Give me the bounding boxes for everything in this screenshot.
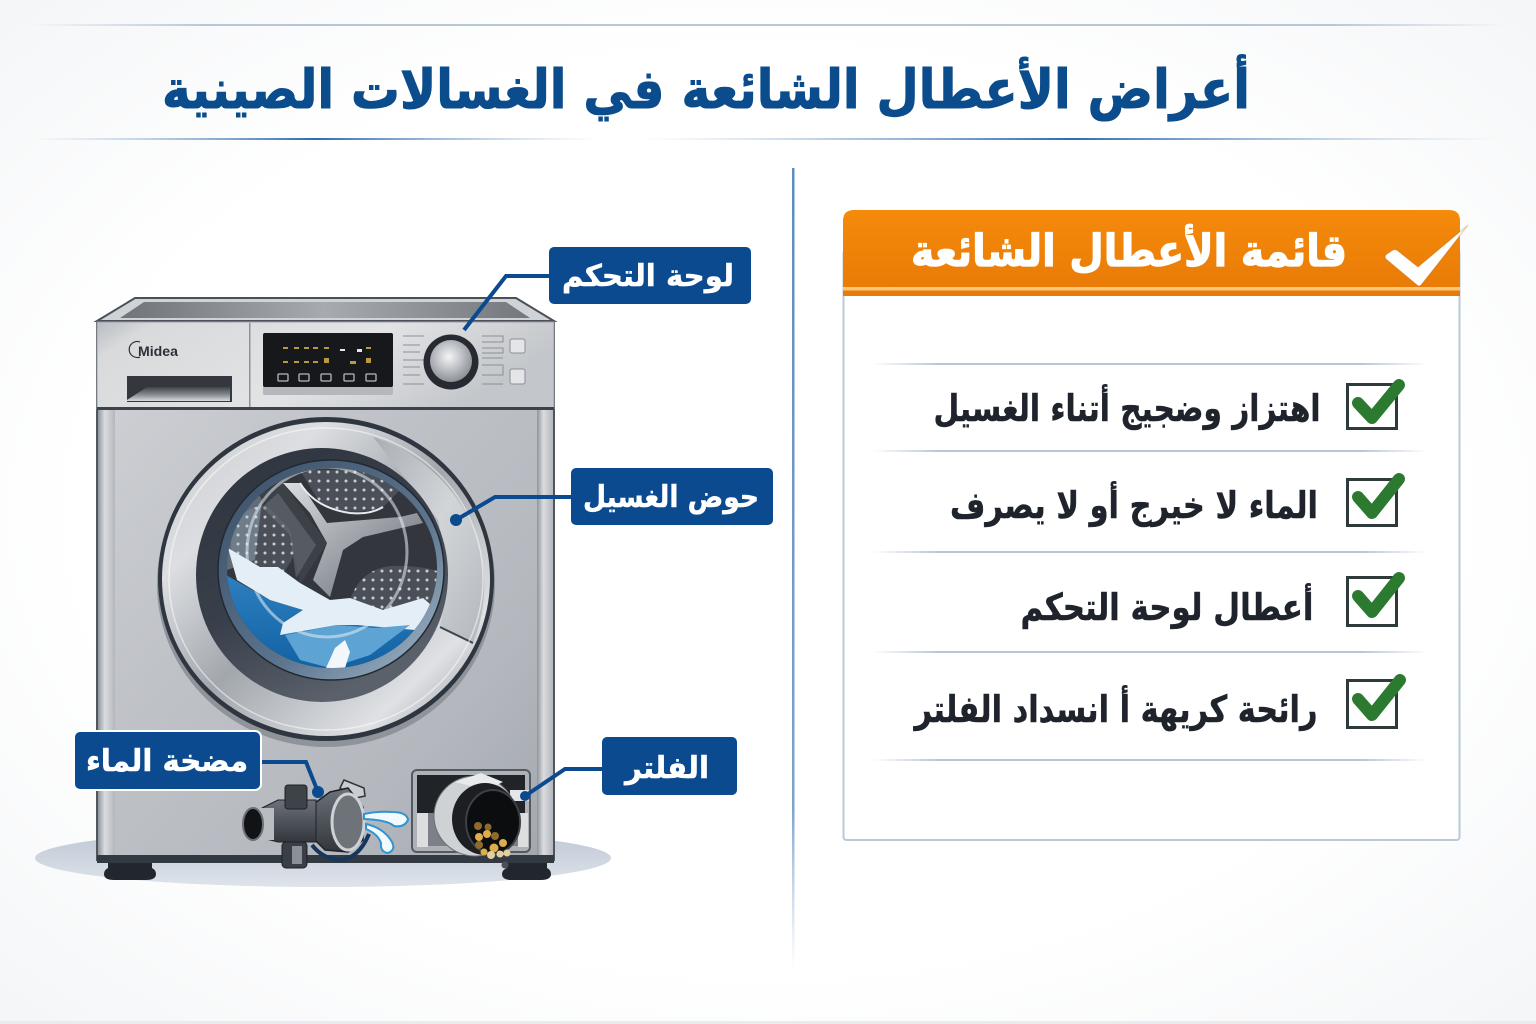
- washer cabinet: [97, 322, 554, 860]
- card header: قائمة الأعطال الشائعة: [911, 224, 1347, 277]
- pump body: [262, 800, 316, 842]
- card header: [843, 210, 1468, 296]
- display: [263, 333, 393, 395]
- filter compartment: [412, 770, 530, 868]
- program labels: [403, 336, 503, 384]
- filter plate: [510, 790, 529, 801]
- drum pockets: [231, 470, 440, 625]
- drain pump: [243, 780, 369, 868]
- floor shadow: [35, 829, 611, 887]
- callout: filter: الفلتر: [623, 751, 709, 786]
- water splash: [364, 812, 408, 853]
- fault item 1: اهتزاز وضجيج أتناء الغسيل: [934, 384, 1320, 430]
- title: أعراض الأعطال الشائعة في الغسالات الصينية: [162, 54, 1250, 122]
- pump top tab: [340, 780, 365, 798]
- drum window: [227, 468, 437, 668]
- feet: [104, 860, 551, 880]
- glass reflection: [247, 467, 407, 637]
- drum spider: [283, 483, 423, 597]
- pump nozzles: [282, 785, 307, 868]
- debris: [474, 822, 510, 868]
- program knob: [424, 334, 478, 390]
- card body: [844, 250, 1460, 840]
- pump hose: [312, 834, 369, 860]
- washing machine illustration: [35, 298, 611, 887]
- panel: common faults checklist: [843, 210, 1468, 840]
- foam and laundry: [228, 548, 437, 635]
- pump inlet: [243, 808, 274, 840]
- pump housing: [315, 788, 363, 852]
- callout: wash drum: [450, 468, 773, 526]
- callout: water pump: مضخة الماء: [86, 744, 248, 779]
- panel buttons: [510, 339, 525, 384]
- callout: wash drum: حوض الغسيل: [583, 480, 759, 515]
- glass side tint: [227, 496, 262, 570]
- detergent drawer: [127, 376, 232, 402]
- callout: control panel: لوحة التحكم: [562, 259, 734, 294]
- callout: control panel: [464, 247, 751, 330]
- fault item 2: الماء لا خيرج أو لا يصرف: [950, 481, 1318, 527]
- pump face: [332, 794, 364, 850]
- door: [157, 417, 495, 747]
- control panel: [97, 322, 554, 410]
- icon: large check mark: [1385, 225, 1468, 286]
- fault item 3: أعطال لوحة التحكم: [1020, 583, 1314, 629]
- callout: filter: [520, 737, 737, 801]
- water: [227, 576, 426, 668]
- filter cylinder: [434, 773, 520, 856]
- top cover: [97, 298, 554, 321]
- door handle: [373, 437, 484, 643]
- fault item 4: رائحة كريهة أ انسداد الفلتر: [913, 685, 1318, 731]
- brand logo: Midea: [138, 343, 178, 359]
- callout: water pump: [74, 731, 324, 798]
- dark drum panels: [258, 483, 327, 585]
